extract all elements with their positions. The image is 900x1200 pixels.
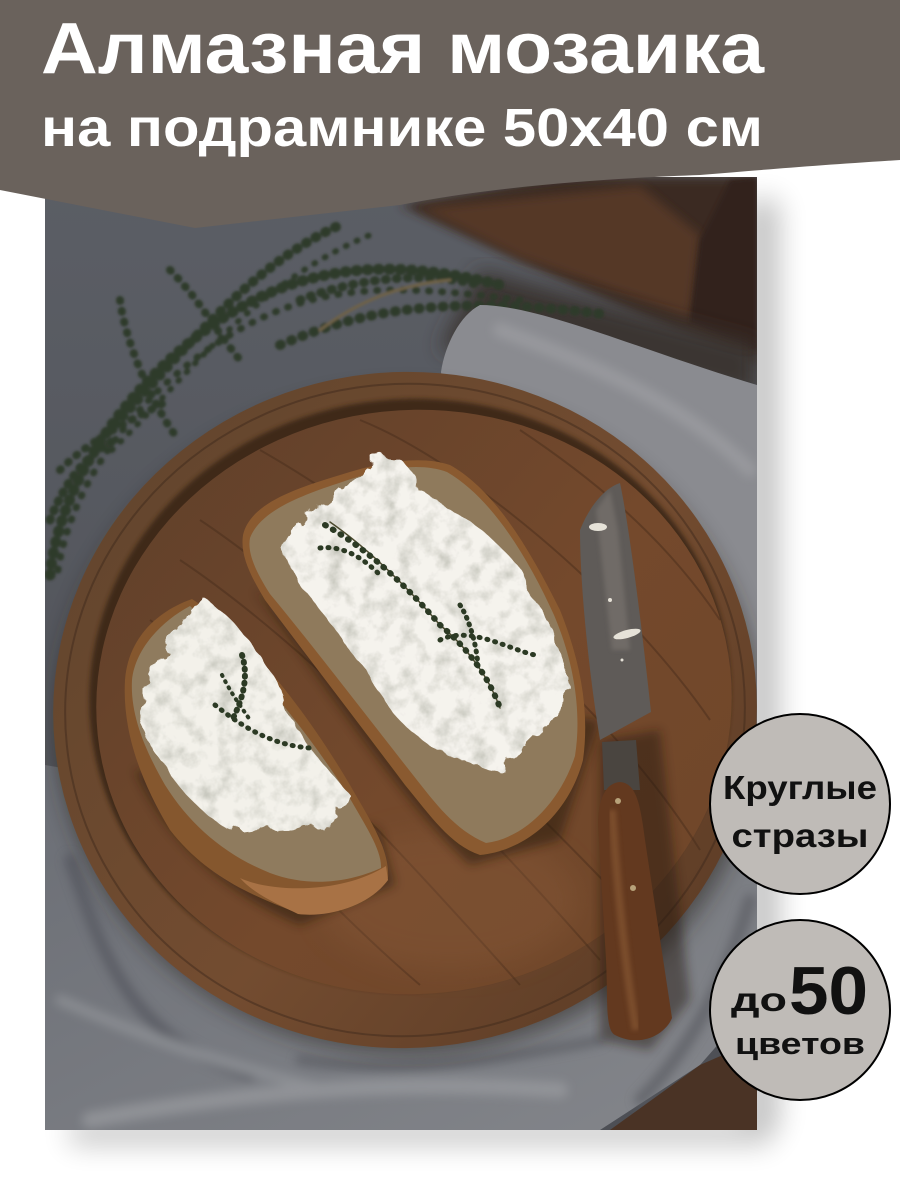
badge: up to 50 colours: цветов [735,1026,865,1061]
handle grain [612,810,636,1030]
background table [45,177,757,1130]
wooden plate [53,372,757,1048]
badge: up to 50 colours: до [731,981,787,1018]
bread shadow [135,770,395,925]
crust [125,599,388,913]
wood grain [130,420,720,985]
plate inner shade [88,397,732,982]
header banner [0,0,900,228]
badge: round rhinestones: Круглые [723,769,877,806]
plate shadow [55,389,761,1055]
bolster [602,740,640,790]
cloth folds [60,330,750,1120]
crumbs on blade [589,523,642,662]
subtitle: на подрамнике 50х40 см [41,98,763,158]
linen cloth lower left [45,765,757,1130]
rim groove [64,382,746,1038]
table wood lower right [610,1056,757,1130]
bread shadow [255,590,600,865]
cottage cheese [285,456,572,770]
small bread slice [125,599,395,925]
badge: up to 50 colours: 50 [789,953,868,1029]
plate rim [53,372,757,1048]
wood light patch [338,841,568,962]
rivets [615,798,636,891]
badge: round rhinestones [710,714,890,894]
thyme on small slice [215,655,310,748]
knife shadow [600,730,690,1050]
plate centre [96,410,732,994]
photo: bread with cottage cheese on wooden plate [20,177,790,1130]
large bread slice [242,456,600,865]
knife [580,483,690,1050]
title: Алмазная мозаика [41,9,765,89]
badge: up to 50 colours [710,920,890,1100]
cottage cheese [140,600,350,832]
blade [580,483,651,740]
blurred dark area right of the herbs [440,270,757,400]
linen cloth upper right [441,305,757,724]
thyme on large slice [320,522,535,708]
wooden beam [400,177,757,365]
blade highlights [596,490,630,650]
crumb [249,467,577,843]
badge: round rhinestones: стразы [732,817,868,854]
crumb [132,606,381,882]
canvas shadow [70,200,779,1144]
lower crust highlight [240,866,388,915]
crust [242,460,585,855]
thyme sprigs, blurred [50,225,610,575]
handle [598,782,672,1040]
